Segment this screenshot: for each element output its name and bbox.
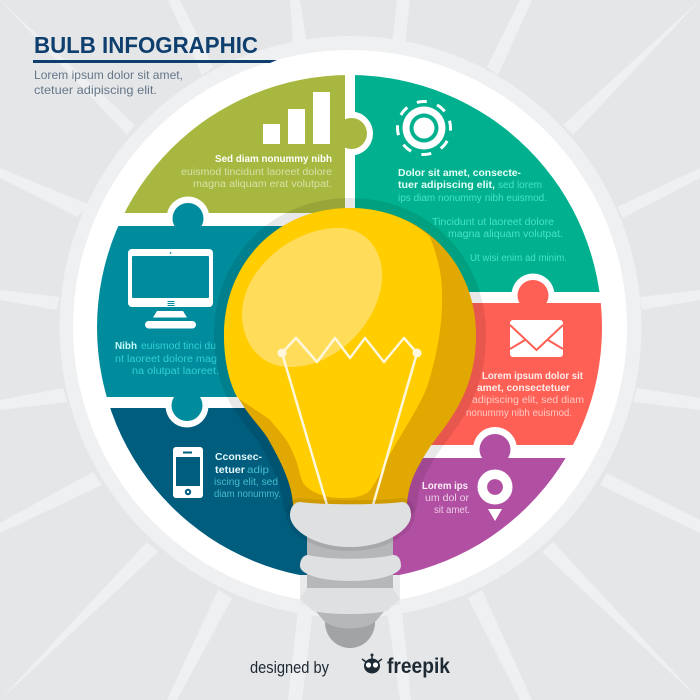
text: dark blue panel: diam nonummy. <box>214 489 281 500</box>
panel: purple bottom right <box>393 427 566 575</box>
text: teal panel: euismod tinci du <box>141 341 216 352</box>
outer light ring <box>60 36 642 618</box>
bulb highlight <box>242 228 382 367</box>
icon: location pin <box>482 474 508 521</box>
panel: teal green top right <box>355 75 600 292</box>
icon: smartphone <box>173 447 203 498</box>
illustration: bulb screw cap <box>290 502 411 648</box>
text: teal green panel: tuer adipiscing elit, <box>398 180 495 191</box>
text: purple panel <box>422 481 470 516</box>
icon: desktop monitor <box>128 249 213 328</box>
text: dark blue panel: adip <box>247 465 270 476</box>
text: teal panel: na olutpat laoreet. <box>132 366 219 377</box>
text: coral panel: nonummy nibh euismod. <box>466 408 572 419</box>
footer credit: designed by <box>250 658 329 677</box>
text: teal panel: nt laoreet dolore mag <box>115 354 217 365</box>
filament <box>278 338 422 505</box>
footer credit <box>250 654 450 678</box>
text: dark blue panel <box>214 452 281 500</box>
illustration: light bulb <box>224 208 476 505</box>
subtitle: Lorem ipsum dolor sit amet, <box>34 68 183 82</box>
icon: freepik logo <box>362 654 382 674</box>
text: purple panel: um dol or <box>425 493 470 504</box>
text: dark blue panel: Cconsec- <box>215 452 262 463</box>
text: olive panel: euismod tincidunt laoreet dolore <box>181 167 332 178</box>
icon: envelope <box>510 320 563 357</box>
text: teal green panel: Tincidunt ut laoreet dolore <box>432 217 554 228</box>
text: teal green panel: Ut wisi enim ad minim. <box>470 253 567 264</box>
text: teal green panel: magna aliquam volutpat. <box>448 229 563 240</box>
text: olive panel: Sed diam nonummy nibh <box>215 154 332 165</box>
bulb glass yellow <box>224 208 442 498</box>
text: teal panel: Nibh <box>115 341 137 352</box>
panel: teal left <box>97 196 283 428</box>
text: purple panel: sit amet. <box>434 505 470 516</box>
text: coral panel: Lorem ipsum dolor sit <box>482 371 584 382</box>
subtitle: ctetuer adipiscing elit. <box>34 83 157 97</box>
text: olive panel <box>181 154 332 190</box>
white ring <box>73 50 627 604</box>
panel: olive green top left <box>124 75 373 213</box>
text: olive panel: magna aliquam erat volutpat. <box>193 179 332 190</box>
text: purple panel: Lorem ips <box>422 481 468 492</box>
panel: coral right <box>431 274 602 445</box>
text: dark blue panel: iscing elit, sed <box>214 477 278 488</box>
text: teal green panel <box>398 168 567 264</box>
text: teal panel <box>115 341 219 377</box>
panel: dark blue bottom left <box>110 408 307 576</box>
title: BULB INFOGRAPHIC <box>34 32 258 58</box>
text: dark blue panel: tetuer <box>215 465 245 476</box>
icon: bar chart <box>263 92 330 144</box>
text: teal green panel: Dolor sit amet, consecte- <box>398 168 521 179</box>
text: teal green panel: sed lorem <box>498 180 542 191</box>
text: coral panel: amet, consectetuer <box>477 383 570 394</box>
bulb shadow halo <box>224 208 476 505</box>
subtitle <box>34 68 183 97</box>
icon: gear <box>391 95 457 161</box>
text: coral panel: adipiscing elit, sed diam <box>472 395 584 406</box>
bulb glass shade <box>224 208 476 505</box>
text: coral panel <box>466 371 584 419</box>
footer credit: freepik <box>387 655 450 678</box>
text: teal green panel: ips diam nonummy nibh euismod. <box>398 193 547 204</box>
